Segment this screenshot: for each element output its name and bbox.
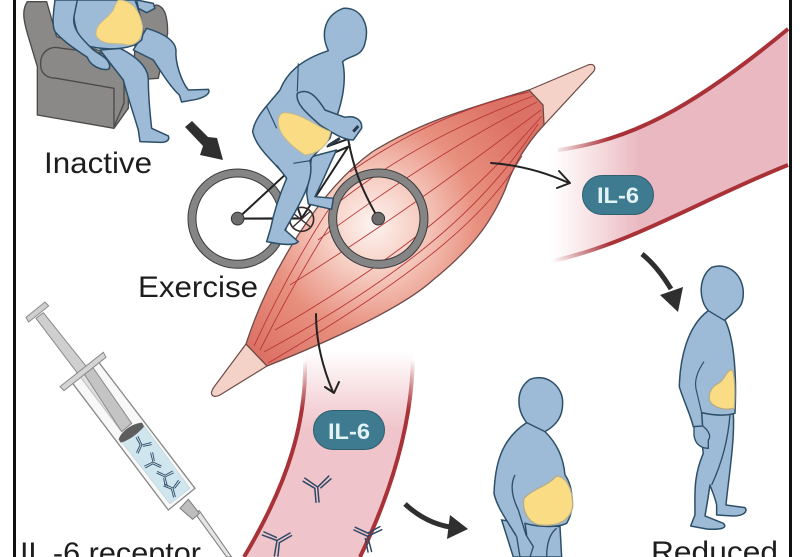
handlebar grip xyxy=(328,126,358,146)
plunger seal xyxy=(119,423,144,443)
arm xyxy=(512,475,533,557)
plunger xyxy=(36,313,132,432)
muscle belly xyxy=(246,90,544,366)
medication xyxy=(121,424,190,504)
IL-6 pill: bottom vessel: IL-6 xyxy=(328,419,370,444)
inactive person in armchair xyxy=(24,0,209,142)
hubs xyxy=(231,212,244,225)
IL-6 pill: right vessel: IL-6 xyxy=(597,183,639,208)
syringe with antibodies xyxy=(26,302,232,557)
muscle fibres xyxy=(254,92,542,363)
legs xyxy=(691,413,746,529)
IL-6 pill: bottom vessel xyxy=(314,410,384,450)
label: Inactive: Inactive xyxy=(44,147,152,180)
bicycle xyxy=(192,138,424,264)
far leg and near leg xyxy=(502,520,562,557)
antibodies in vessel xyxy=(261,476,383,557)
person: high visceral fat xyxy=(494,378,573,557)
head and torso xyxy=(679,266,743,427)
rear wheel xyxy=(192,173,283,264)
arrow: right vessel to reduced person xyxy=(642,254,683,312)
arrow: muscle to bottom vessel xyxy=(316,314,339,393)
tendon: upper right xyxy=(529,64,595,125)
arrow: muscle to right vessel xyxy=(491,163,570,188)
visceral fat xyxy=(278,113,331,155)
visceral fat xyxy=(524,476,573,525)
body xyxy=(53,0,209,142)
arrow: vessel to obese person xyxy=(405,504,468,539)
visceral fat xyxy=(96,0,143,45)
antibodies in syringe xyxy=(131,436,183,499)
blood vessel: bottom xyxy=(244,345,413,557)
hub xyxy=(180,499,199,519)
needle xyxy=(195,511,232,557)
blood vessel: right xyxy=(548,27,788,262)
frame xyxy=(238,138,378,219)
armchair xyxy=(24,2,168,128)
cyclist on bicycle xyxy=(192,8,424,264)
arrow: inactive to exercise xyxy=(185,121,223,160)
tendon: lower left xyxy=(212,344,267,396)
rider xyxy=(253,8,366,245)
visceral fat xyxy=(709,369,735,409)
hand xyxy=(694,426,710,448)
chainring xyxy=(290,207,314,231)
finger flange xyxy=(60,352,106,391)
head and torso xyxy=(494,378,572,537)
label: Exercise: Exercise xyxy=(138,271,258,304)
muscle xyxy=(212,64,595,396)
person: reduced visceral fat xyxy=(679,266,746,529)
front wheel xyxy=(333,173,424,264)
barrel xyxy=(73,362,195,510)
IL-6 pill: right vessel xyxy=(582,176,654,214)
